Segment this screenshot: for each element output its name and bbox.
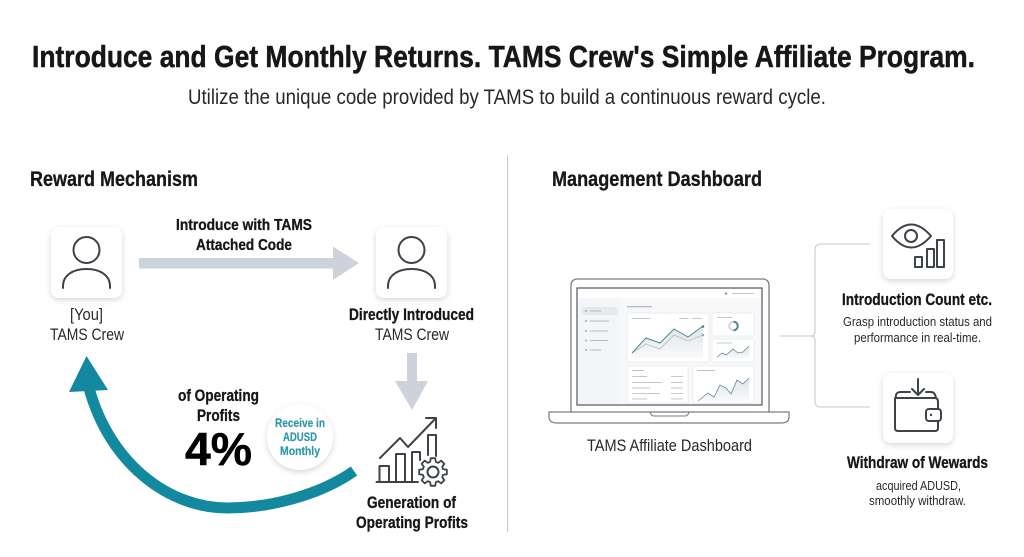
callout: four percent: Profits	[197, 407, 240, 425]
arrow: reward return curve	[69, 356, 354, 508]
arrow: crew to profits	[395, 353, 428, 410]
arrow label: introduce: Attached Code	[196, 237, 292, 254]
label: generation of profits: Operating Profits	[356, 514, 468, 532]
panel: reward mechanism	[30, 168, 474, 532]
callout: four percent: of Operating	[178, 387, 259, 405]
label: generation of profits	[356, 494, 468, 532]
text: withdraw: acquired ADUSD,	[876, 479, 961, 493]
label: dashboard: TAMS Affiliate Dashboard	[587, 436, 752, 455]
arrow label: introduce: Introduce with TAMS	[176, 217, 312, 234]
label: directly introduced: TAMS Crew	[375, 326, 449, 344]
text: withdraw: smoothly withdraw.	[869, 494, 966, 508]
text: introduction count	[842, 291, 992, 345]
heading: reward mechanism: Reward Mechanism	[30, 168, 198, 191]
panel: management dashboard	[549, 168, 992, 508]
label: you	[50, 306, 124, 344]
label: you: [You]	[70, 306, 103, 324]
badge: receive monthly	[267, 404, 333, 470]
label: directly introduced	[349, 306, 474, 344]
heading: management dashboard: Management Dashboard	[552, 168, 762, 191]
icon: profit chart with gear	[376, 418, 447, 486]
text: withdraw: Withdraw of Wewards	[847, 454, 988, 472]
badge: receive monthly: Monthly	[280, 444, 320, 458]
text: introduction count: Introduction Count etc.	[842, 291, 992, 309]
arrow: introduce to crew	[139, 246, 359, 280]
connector bracket	[780, 244, 870, 407]
text: withdraw	[847, 454, 988, 508]
icon: wallet card	[883, 373, 953, 443]
text: introduction count: Grasp introduction status and	[843, 315, 992, 329]
label: directly introduced: Directly Introduced	[349, 306, 474, 324]
subtitle: Utilize the unique code provided by TAMS to build a continuous reward cycle.	[188, 86, 826, 109]
callout: four percent: 4%	[185, 423, 252, 475]
icon: introduced person card	[376, 227, 447, 298]
arrow label: introduce	[176, 217, 312, 254]
label: you: TAMS Crew	[50, 326, 124, 344]
text: introduction count: performance in real-time.	[854, 331, 981, 345]
badge: receive monthly: ADUSD	[283, 430, 317, 444]
panel divider	[506, 155, 508, 532]
callout: four percent	[178, 387, 259, 475]
label: generation of profits: Generation of	[367, 494, 456, 512]
icon: eye and bars card	[883, 209, 953, 279]
icon: you person card	[51, 227, 122, 298]
laptop illustration	[549, 279, 789, 423]
badge: receive monthly: Receive in	[275, 416, 325, 430]
